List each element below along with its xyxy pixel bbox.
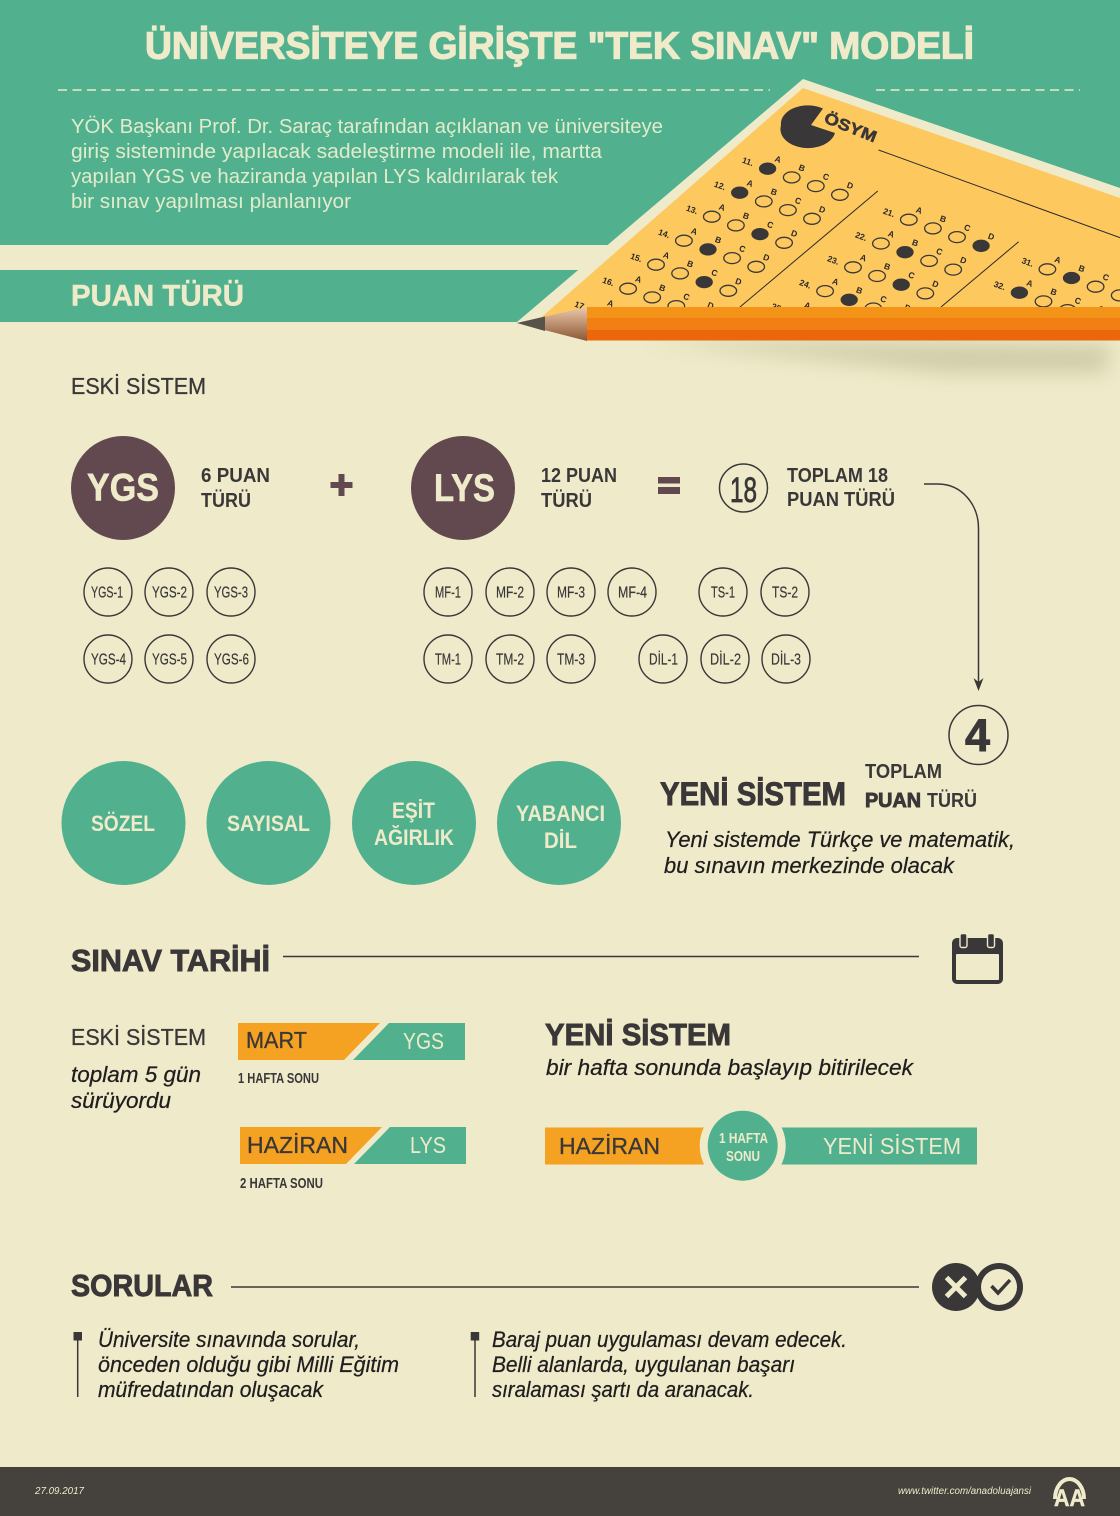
answer rows: B	[827, 308, 836, 320]
total 4 label: TÜRÜ	[927, 789, 977, 812]
timeline: haziran LYS: LYS	[410, 1132, 446, 1158]
YGS score type chips: YGS-5	[152, 652, 187, 668]
answer rows: B	[769, 186, 779, 198]
question note 1: Üniversite sınavında sorular,	[98, 1327, 360, 1352]
new system dates heading	[545, 1017, 914, 1080]
new system dates heading: YENİ SİSTEM	[545, 1017, 731, 1052]
answer rows: B	[1077, 263, 1086, 274]
plus sign	[330, 474, 352, 496]
intro text: yapılan YGS ve haziranda yapılan LYS kaldırılarak tek	[71, 166, 559, 188]
score types: sözel: SÖZEL	[91, 811, 155, 836]
answer rows: A	[773, 153, 783, 165]
total 18 badge	[720, 464, 768, 512]
answer rows: C	[907, 270, 916, 281]
answer rows: C	[822, 171, 831, 182]
answer rows: 15.	[629, 251, 644, 264]
answer rows: 32.	[992, 279, 1007, 292]
icon: cross and check	[932, 1263, 1023, 1311]
answer rows: B	[883, 261, 892, 272]
answer rows: D	[818, 204, 827, 215]
score types: eşit ağırlık: AĞIRLIK	[374, 825, 454, 850]
answer rows: B	[742, 210, 751, 222]
question note 1: önceden olduğu gibi Milli Eğitim	[98, 1352, 399, 1377]
new system heading: YENİ SİSTEM	[660, 776, 846, 812]
answer rows: D	[931, 278, 940, 290]
answer rows: C	[1073, 295, 1082, 306]
timeline: new system: 1 HAFTA	[719, 1131, 768, 1147]
answer rows: C	[682, 291, 691, 302]
answer rows: A	[718, 201, 727, 213]
total 18 label	[787, 465, 895, 511]
answer rows: 24.	[798, 277, 813, 291]
LYS score type chips: DİL-2	[710, 650, 741, 668]
answer rows: D	[790, 228, 799, 239]
timeline: mart YGS: YGS	[403, 1028, 444, 1054]
LYS score type chips: TS-1	[711, 584, 735, 602]
YGS score type chips: YGS-1	[91, 584, 123, 602]
LYS badge: LYS	[434, 467, 495, 510]
answer rows: D	[903, 302, 912, 314]
timeline: new system: HAZİRAN	[559, 1133, 660, 1159]
footer	[0, 1467, 1120, 1516]
score types: yabancı dil: YABANCI	[516, 801, 605, 826]
YGS score type chips: YGS-3	[214, 584, 248, 602]
question note 2: sıralaması şartı da aranacak.	[492, 1377, 754, 1402]
intro text: YÖK Başkanı Prof. Dr. Saraç tarafından açıklanan ve üniversiteye	[71, 116, 663, 138]
score types: yabancı dil: DİL	[544, 828, 577, 853]
total 4 badge	[949, 706, 1008, 764]
timeline: haziran LYS	[240, 1127, 466, 1192]
pencil	[517, 307, 1120, 341]
LYS score type chips: MF-2	[496, 584, 524, 602]
intro text: giriş sisteminde yapılacak sadeleştirme modeli ile, martta	[71, 141, 603, 163]
answer rows: B	[686, 258, 695, 270]
answer rows: C	[654, 315, 663, 326]
equals sign	[658, 477, 680, 494]
answer rows: A	[662, 249, 671, 261]
LYS score type chips: TM-2	[496, 652, 524, 668]
heading: eski sistem: ESKİ SİSTEM	[71, 373, 206, 399]
answer rows: D	[762, 252, 771, 263]
answer rows: D	[959, 254, 968, 266]
title: ÜNİVERSİTEYE GİRİŞTE "TEK SINAV" MODELİ	[145, 24, 974, 68]
answer rows: 17.	[573, 299, 588, 312]
timeline: new system: SONU	[726, 1149, 760, 1165]
question note 1: müfredatından oluşacak	[98, 1377, 324, 1402]
total 4 badge: 4	[965, 710, 990, 761]
YGS score count	[201, 465, 270, 512]
score types: yabancı dil	[497, 761, 621, 885]
answer rows: D	[987, 231, 996, 242]
pencil shadow	[640, 340, 1112, 373]
footer: www.twitter.com/anadoluajansi	[898, 1486, 1032, 1497]
answer rows: 22.	[854, 230, 868, 243]
LYS score type chips	[424, 568, 810, 683]
footer: 27.09.2017	[34, 1486, 84, 1497]
answer rows: C	[766, 219, 775, 230]
total 18 badge: 18	[730, 471, 757, 510]
answer rows: C	[879, 293, 888, 305]
YGS score type chips	[84, 568, 255, 683]
new system note: bu sınavın merkezinde olacak	[664, 853, 955, 878]
timeline: mart YGS	[238, 1023, 465, 1087]
YGS badge: YGS	[87, 466, 159, 510]
score types: sözel	[62, 761, 186, 885]
YGS score type chips: YGS-6	[214, 652, 249, 668]
icon: calendar	[952, 934, 1003, 984]
score types: sayısal	[206, 761, 330, 885]
answer rows: 21.	[882, 206, 896, 219]
new system dates heading: bir hafta sonunda başlayıp bitirilecek	[546, 1055, 914, 1080]
arrow	[924, 484, 984, 691]
answer rows: B	[1049, 286, 1058, 298]
LYS badge	[411, 436, 515, 540]
old system dates note	[71, 1024, 206, 1113]
answer rows: D	[875, 326, 884, 337]
ÖSYM logo: ÖSYM	[822, 108, 880, 146]
answer sheet illustration	[517, 79, 1120, 349]
section band: puan türü	[0, 270, 580, 322]
answer rows: D	[678, 324, 687, 335]
LYS score type chips: TS-2	[772, 584, 798, 602]
YGS score type chips: YGS-2	[152, 584, 187, 602]
answer rows: B	[939, 213, 948, 225]
LYS score count: TÜRÜ	[541, 489, 592, 512]
ÖSYM logo	[780, 105, 880, 148]
LYS score type chips: MF-4	[618, 584, 647, 602]
intro text	[71, 116, 663, 213]
answer rows: A	[859, 252, 868, 264]
answer rows: 12.	[713, 179, 727, 192]
question note 2	[471, 1327, 847, 1402]
answer rows: B	[630, 306, 639, 318]
answer rows: D	[1097, 304, 1107, 315]
answer rows: B	[797, 162, 807, 174]
timeline: mart YGS: MART	[246, 1027, 307, 1053]
answer rows: 16.	[601, 275, 616, 288]
LYS score type chips: TM-1	[435, 652, 461, 668]
answer rows: C	[794, 195, 803, 206]
logo: Anadolu Ajansı: AA	[1054, 1485, 1085, 1512]
answer rows: C	[738, 243, 747, 254]
total 4 label	[865, 761, 977, 812]
timeline: new system: YENİ SİSTEM	[823, 1133, 961, 1159]
timeline: haziran LYS: 2 HAFTA SONU	[240, 1175, 323, 1192]
YGS score count: 6 PUAN	[201, 465, 270, 487]
answer rows: B	[911, 237, 920, 248]
dashed divider	[58, 89, 1080, 91]
answer rows: A	[634, 273, 643, 285]
answer rows: 11.	[741, 155, 755, 168]
answer rows: C	[963, 222, 972, 233]
answer rows: 25.	[770, 301, 785, 314]
LYS score count: 12 PUAN	[541, 465, 617, 487]
LYS score count	[541, 465, 617, 512]
answer rows: A	[1025, 277, 1034, 289]
question note 1	[74, 1327, 399, 1402]
answer rows: D	[734, 276, 743, 287]
intro text: bir sınav yapılması planlanıyor	[71, 191, 351, 213]
answer rows: A	[745, 177, 755, 189]
answer rows: B	[714, 234, 723, 246]
answer rows: A	[915, 204, 924, 216]
score types: eşit ağırlık	[352, 761, 476, 885]
YGS score type chips: YGS-4	[91, 652, 126, 668]
answer rows	[573, 143, 1120, 349]
answer rows: D	[846, 180, 855, 191]
old system dates note: sürüyordu	[71, 1088, 171, 1113]
answer rows: 23.	[826, 253, 841, 267]
answer rows: 13.	[685, 203, 699, 216]
total 4 label: TOPLAM	[865, 761, 942, 783]
LYS score type chips: MF-3	[557, 584, 585, 602]
answer rows: C	[851, 317, 860, 329]
answer rows: B	[658, 282, 667, 294]
answer rows: A	[831, 276, 840, 287]
question note 2: Baraj puan uygulaması devam edecek.	[492, 1327, 847, 1352]
total 18 label: PUAN TÜRÜ	[787, 488, 895, 511]
answer rows: A	[803, 300, 812, 311]
LYS score type chips: MF-1	[435, 584, 461, 602]
answer rows: C	[935, 246, 944, 257]
answer rows: 31.	[1020, 255, 1035, 269]
new system note	[664, 827, 1015, 878]
LYS score type chips: TM-3	[557, 652, 585, 668]
question note 2: Belli alanlarda, uygulanan başarı	[492, 1352, 795, 1377]
timeline: haziran LYS: HAZİRAN	[247, 1132, 348, 1158]
answer rows: A	[606, 297, 615, 309]
LYS score type chips: DİL-1	[649, 650, 678, 668]
answer rows: 14.	[657, 227, 671, 240]
LYS score type chips: DİL-3	[771, 650, 801, 668]
answer rows: C	[710, 267, 719, 278]
YGS score count: TÜRÜ	[201, 489, 251, 512]
score types: sayısal: SAYISAL	[227, 811, 310, 836]
YGS badge	[71, 436, 175, 540]
heading: sınav tarihi: SINAV TARİHİ	[71, 943, 270, 978]
heading: sorular: SORULAR	[71, 1268, 213, 1303]
header background	[0, 0, 1120, 245]
total 4 label: PUAN	[865, 790, 921, 812]
answer rows: B	[855, 285, 864, 296]
timeline: mart YGS: 1 HAFTA SONU	[238, 1070, 319, 1087]
total 18 label: TOPLAM 18	[787, 465, 888, 487]
answer rows: A	[1053, 254, 1062, 266]
answer rows: C	[1101, 272, 1110, 283]
old system dates note: toplam 5 gün	[71, 1062, 201, 1087]
timeline: new system	[545, 1103, 977, 1189]
old system dates note: ESKİ SİSTEM	[71, 1024, 206, 1050]
score types: eşit ağırlık: EŞİT	[392, 798, 435, 823]
answer rows: D	[706, 300, 715, 311]
new system note: Yeni sistemde Türkçe ve matematik,	[665, 827, 1015, 852]
answer rows: A	[887, 228, 896, 240]
section band: puan türü: PUAN TÜRÜ	[71, 280, 244, 312]
answer rows: A	[690, 225, 699, 237]
